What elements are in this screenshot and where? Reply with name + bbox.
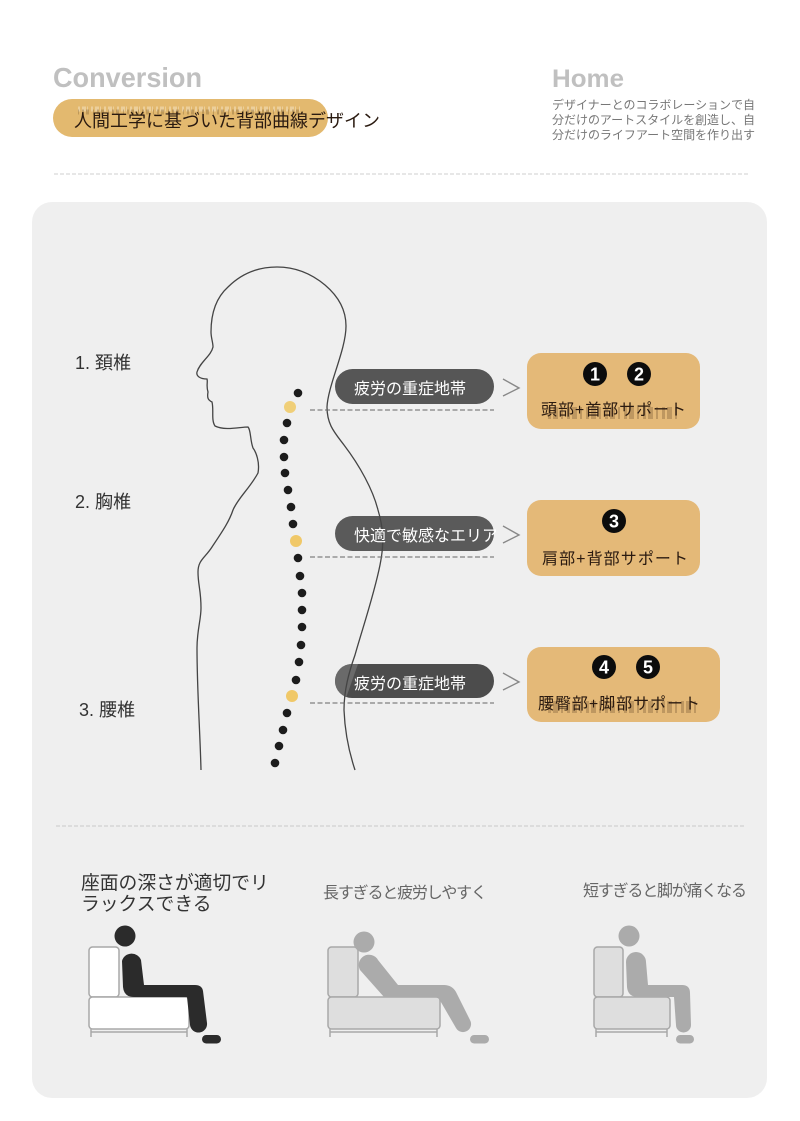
home description: デザイナーとのコラボレーションで自 — [552, 97, 755, 112]
caption: too long: 長すぎると疲労しやすく — [323, 884, 487, 902]
card: head and neck support: 2 — [634, 364, 644, 384]
title smudge — [78, 109, 300, 112]
spine labels — [75, 353, 135, 720]
arrow chevrons — [503, 379, 519, 690]
card: waist and leg support — [527, 647, 720, 722]
card: head and neck support: 1 — [590, 364, 600, 384]
main panel — [32, 202, 767, 1098]
pill: fatigue zone lower — [335, 664, 494, 698]
caption: proper depth — [81, 872, 269, 914]
card: head and neck support: 頭部+首部サポート — [541, 401, 686, 419]
pill labels: 快適で敏感なエリア — [354, 527, 498, 545]
card: waist and leg support: 4 — [599, 658, 609, 678]
caption: proper depth: 座面の深さが適切でリ — [81, 872, 269, 893]
card: waist and leg support: 5 — [643, 658, 653, 678]
card: shoulder and back support: 3 — [609, 512, 619, 532]
title pill background — [53, 99, 328, 137]
heading: Home: Home — [552, 65, 624, 93]
spine labels: 2. 胸椎 — [75, 492, 131, 512]
figure: seat too short — [594, 926, 694, 1044]
header: home block — [552, 65, 755, 142]
spine labels: 3. 腰椎 — [79, 700, 135, 720]
figure: proper sitting posture — [89, 926, 221, 1044]
dashed leader lines — [310, 410, 494, 703]
home description: 分だけのアートスタイルを創造し、自 — [552, 113, 755, 127]
title text: 人間工学に基づいた背部曲線デザイン — [74, 111, 380, 131]
card: shoulder and back support: 肩部+背部サポート — [542, 550, 688, 568]
pill labels: 疲労の重症地帯 — [354, 675, 466, 693]
figure: seat too long — [328, 932, 489, 1044]
card: waist and leg support: 腰臀部+脚部サポート — [538, 695, 700, 713]
pill: comfortable sensitive zone — [335, 516, 494, 551]
caption: too short: 短すぎると脚が痛くなる — [583, 882, 747, 900]
pill labels: 疲労の重症地帯 — [354, 380, 466, 398]
pill: fatigue zone upper — [335, 369, 494, 404]
heading: Conversion: Conversion — [53, 62, 202, 93]
pill labels — [354, 380, 498, 693]
home description: 分だけのライフアート空間を作り出す — [552, 128, 755, 142]
card: shoulder and back support — [527, 500, 700, 576]
spine dots — [271, 389, 306, 767]
header: conversion title — [53, 62, 380, 137]
home description — [552, 97, 755, 142]
spine labels: 1. 頚椎 — [75, 353, 131, 373]
human profile outline — [197, 267, 383, 770]
caption: proper depth: ラックスできる — [81, 893, 212, 914]
card: head and neck support — [527, 353, 700, 429]
